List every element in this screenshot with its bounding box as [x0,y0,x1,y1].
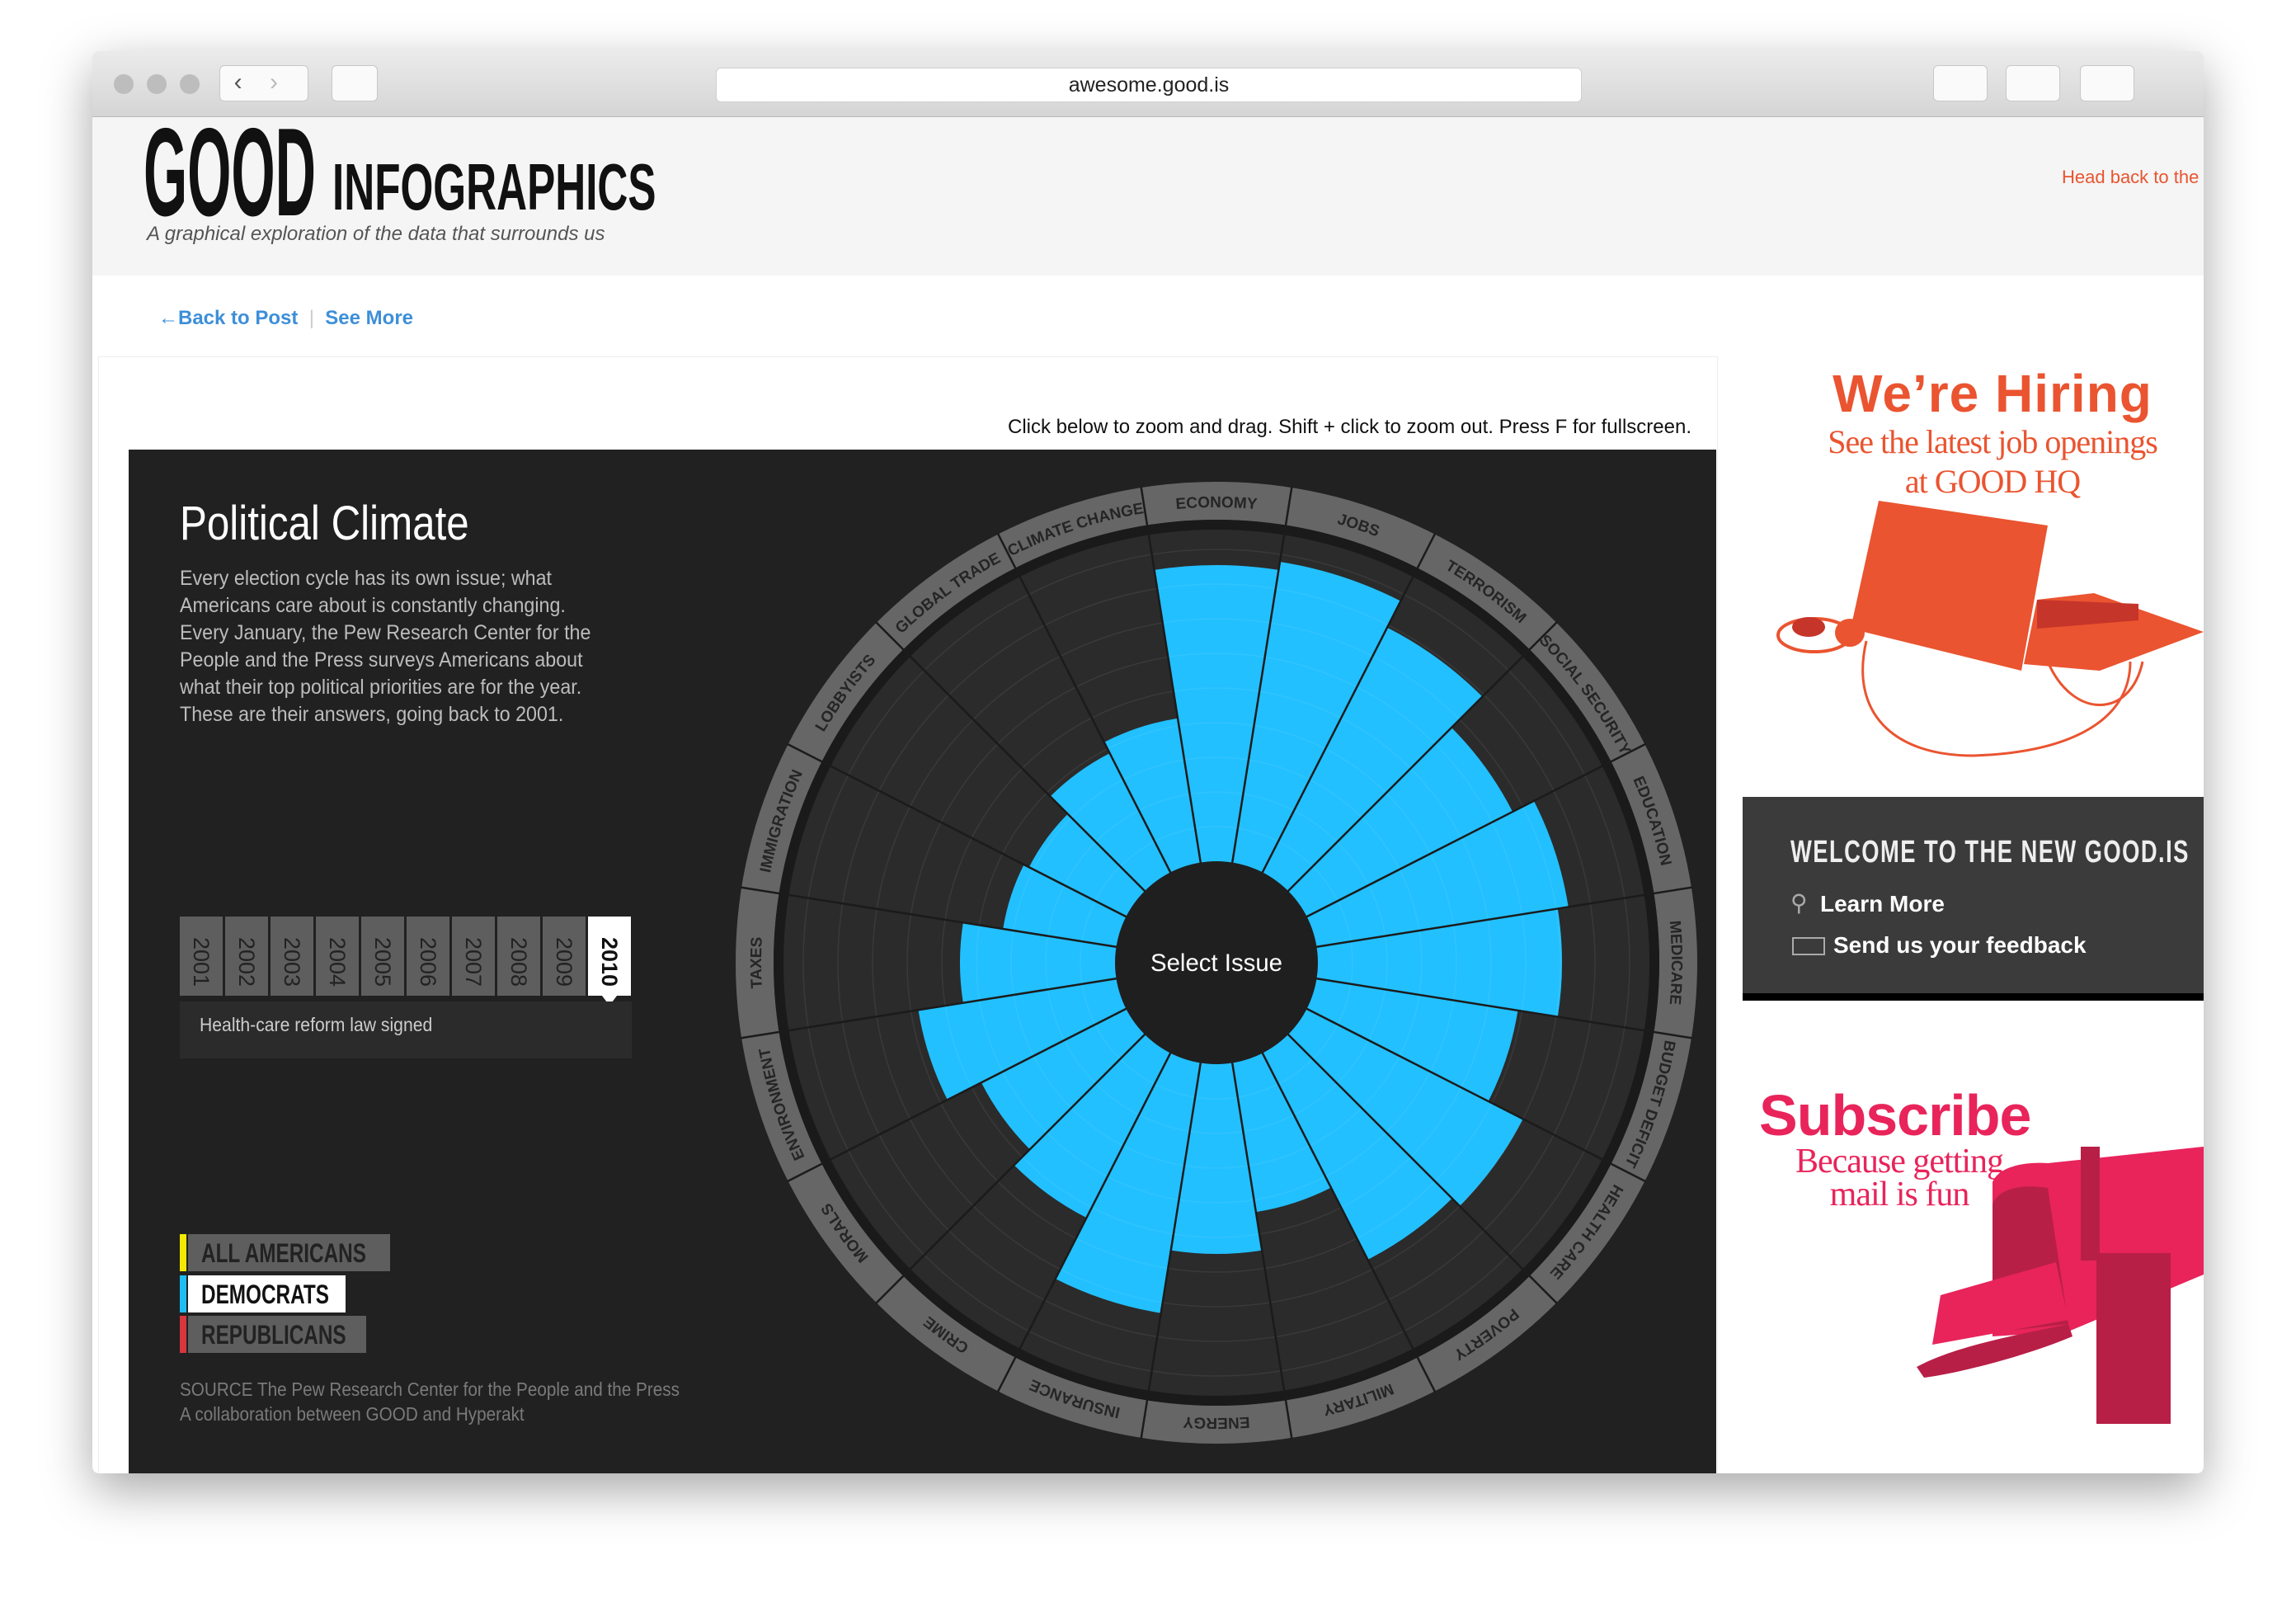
legend: REPUBLICANS [201,1320,346,1350]
issue labels: BUDGET DEFICIT [1626,1041,1676,1169]
issue labels: CRIME [923,1317,967,1353]
year selector: 2002 [234,937,259,987]
traffic lights [114,74,200,94]
issue labels [750,497,1682,1429]
year selector: 2006 [416,937,440,987]
issue labels: JOBS [1338,514,1379,536]
sidebar: welcome box: WELCOME TO THE NEW GOOD.IS [1790,835,2190,869]
center button: Select Issue [1150,950,1282,977]
sidebar: welcome box: Learn More [1820,891,1945,917]
instruction: Click below to zoom and drag. Shift + click to zoom out. Press F for fullscreen. [1008,416,1691,438]
intro text: Every election cycle has its own issue; what [180,567,552,590]
year selector: 2009 [552,937,576,987]
content frame [98,356,1718,1478]
sidebar: hiring ad: We’re Hiring [1833,364,2152,423]
intro text: Every January, the Pew Research Center for the [180,621,590,644]
year caption [180,1001,632,1058]
tagline: A graphical exploration of the data that surrounds us [147,223,605,245]
source [180,1378,680,1425]
year selector: 2003 [280,937,304,987]
chart: radial issues [736,482,1697,1444]
year selector: 2004 [325,937,350,987]
intro text [180,567,590,726]
sidebar: subscribe ad: mail is fun [1830,1176,1969,1213]
issue labels: POVERTY [1456,1308,1519,1361]
issue labels: GLOBAL TRADE [896,553,1001,632]
year selector: 2010 [597,937,622,987]
logo INFOGRAPHICS: INFOGRAPHICS [332,150,656,224]
label ring [755,501,1678,1425]
nav buttons [219,65,308,101]
sidebar: welcome box [1743,797,2204,1001]
logo GOOD: GOOD [144,102,316,243]
issue labels: MEDICARE [1669,921,1682,1005]
issue labels: ENVIRONMENT [759,1049,805,1161]
nav buttons: ‹ › [234,68,278,96]
sidebar: subscribe ad: Because getting [1795,1143,2003,1181]
center button [1115,861,1318,1064]
issue labels: ECONOMY [1176,497,1257,509]
header [92,117,2204,276]
issue labels: MORALS [821,1204,868,1264]
url bar: awesome.good.is [1069,73,1229,97]
bars [963,709,1470,1216]
source: SOURCE The Pew Research Center for the People and the Press [180,1378,680,1400]
head back link: Head back to the [2062,167,2199,187]
issue labels: MILITARY [1324,1384,1394,1416]
intro text: Americans care about is constantly changing. [180,594,566,617]
intro text: These are their answers, going back to 2001. [180,703,563,726]
intro text: People and the Press surveys Americans about [180,648,583,672]
toolbar [92,51,2204,117]
year selector [180,917,631,1001]
issue labels: SOCIAL SECURITY [1541,635,1631,752]
icon: key: ⚲ [1790,890,1808,916]
icon: mailbox [1917,1147,2204,1424]
source: A collaboration between GOOD and Hyperakt [180,1403,525,1425]
issue labels: CLIMATE CHANGE [1008,502,1144,554]
year selector: 2005 [370,937,395,987]
issue labels: IMMIGRATION [760,769,802,873]
year selector: 2007 [461,937,486,987]
icon: laptop [1776,501,2204,757]
intro text: what their top political priorities are for the year. [180,676,581,699]
panel: dark infographic [129,450,1716,1473]
issue labels: TERRORISM [1448,559,1527,624]
issue labels: HEALTH CARE [1550,1185,1623,1280]
year caption: Health-care reform law signed [200,1014,432,1035]
legend: DEMOCRATS [201,1279,329,1309]
sidebar: subscribe ad: Subscribe [1759,1083,2030,1148]
sidebar: hiring ad: at GOOD HQ [1905,463,2080,500]
year selector: 2008 [506,937,531,987]
issue labels: LOBBYISTS [815,655,874,732]
issue labels: ENERGY [1183,1417,1249,1429]
legend: ALL AMERICANS [201,1238,366,1268]
legend [180,1234,390,1353]
sidebar: subscribe ad [1759,1083,2204,1424]
issue labels: INSURANCE [1029,1379,1120,1419]
nav links: ←Back to Post | See More [158,307,413,329]
sidebar: welcome box: Send us your feedback [1833,932,2087,958]
issue labels: TAXES [750,937,762,988]
issue labels: EDUCATION [1633,775,1672,865]
sidebar: hiring ad [1776,364,2204,757]
url bar [716,68,1582,102]
title: Political Climate [180,497,469,550]
sidebar: hiring ad: See the latest job openings [1828,423,2157,460]
year selector: 2001 [189,937,214,987]
icon: envelope [1792,937,1825,955]
